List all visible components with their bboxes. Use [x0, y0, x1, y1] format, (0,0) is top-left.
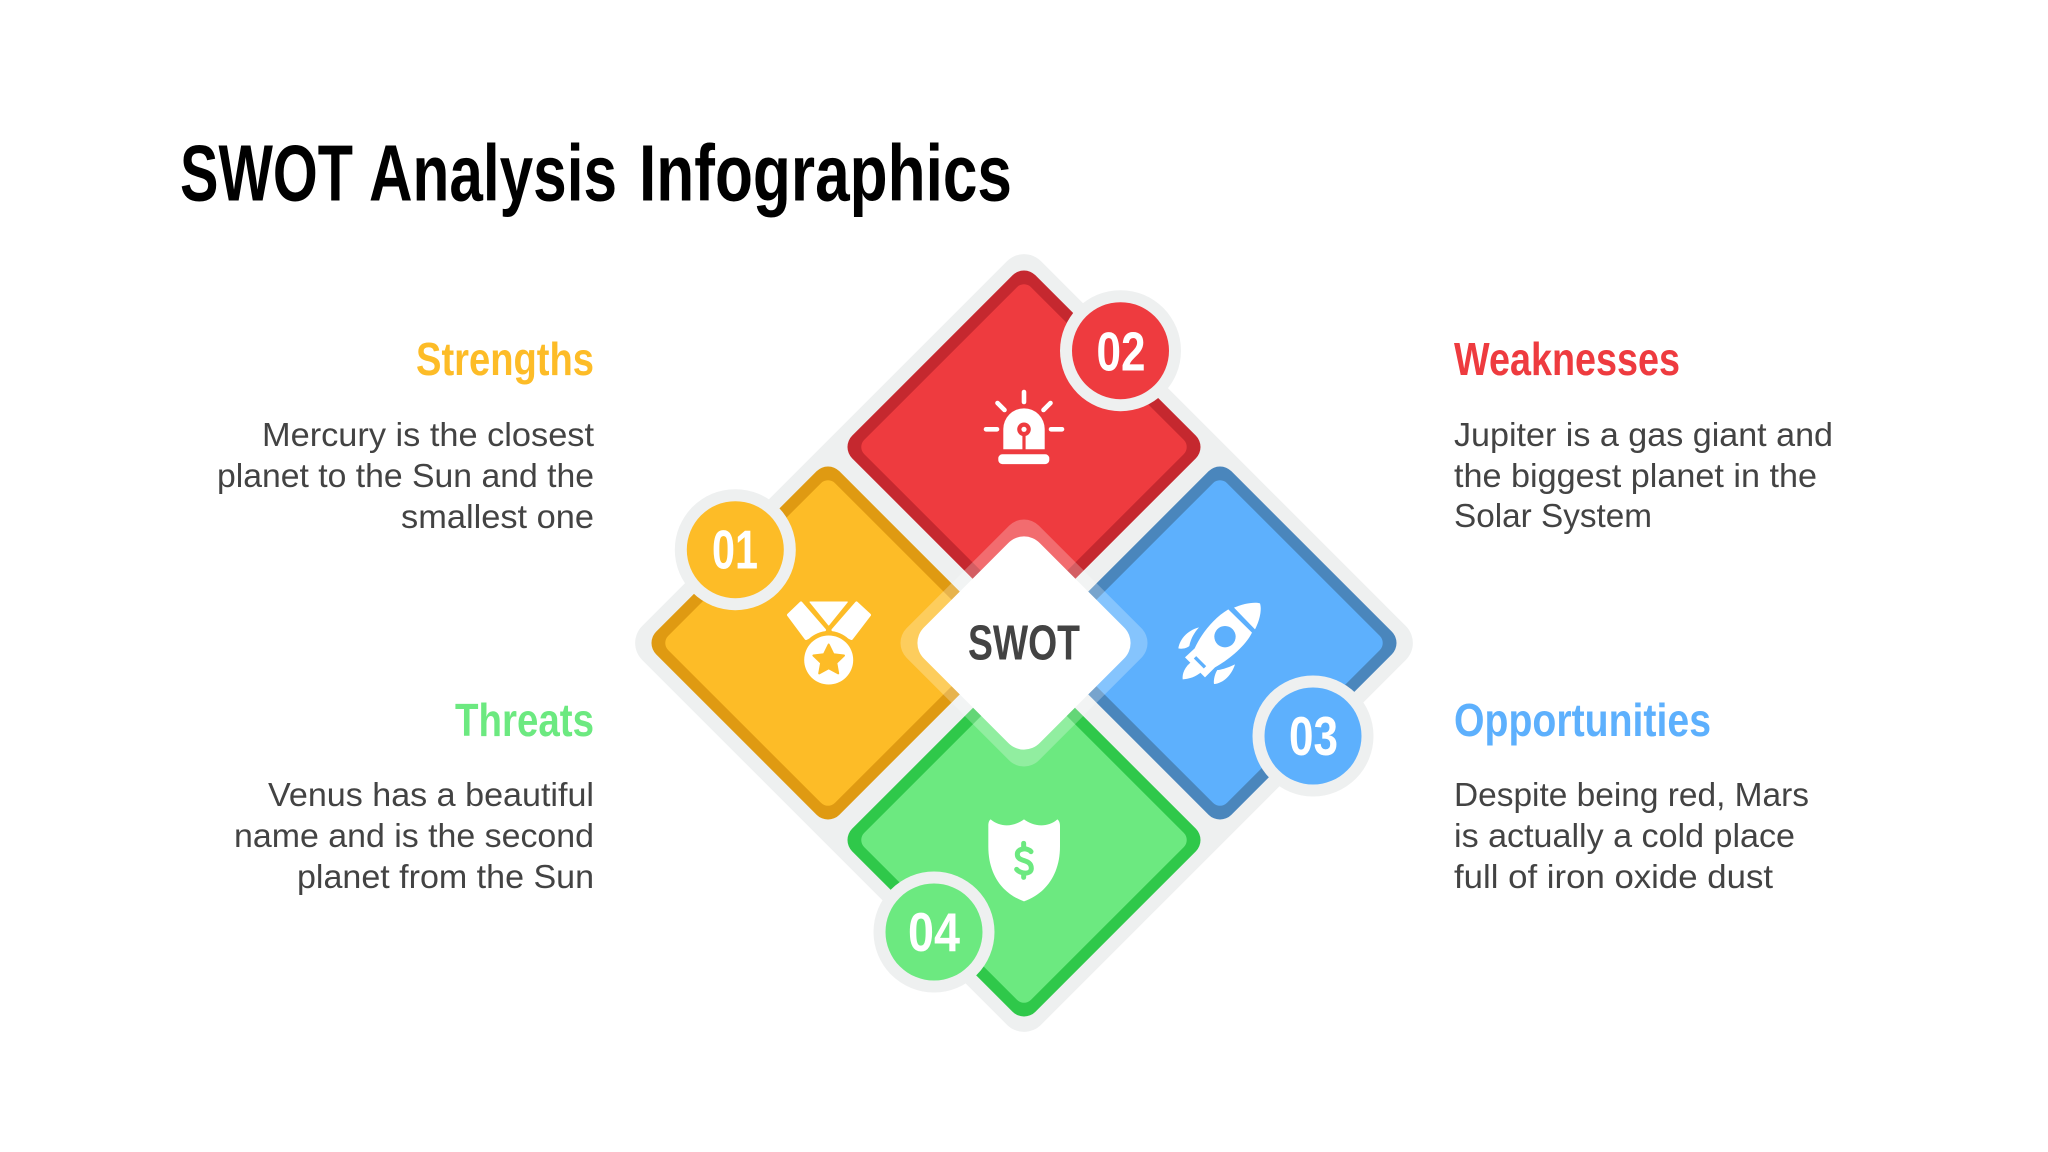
- panel: strengths diamond: [645, 460, 1011, 826]
- text block: strengths description: planet to the Sun and the: [217, 457, 594, 494]
- gray diamond background: [625, 244, 1423, 1042]
- icon: rocket: [1178, 603, 1261, 684]
- badge: 01: [675, 489, 796, 610]
- panel: threats diamond: [841, 657, 1207, 1023]
- title: Infographics: [639, 128, 1012, 218]
- badge: 04: 04: [908, 901, 960, 963]
- badge: 04: [874, 872, 994, 992]
- badge: 03: [1252, 676, 1374, 796]
- text block: threats description: name and is the second: [234, 817, 594, 854]
- text block: strengths description: Mercury is the closest: [262, 416, 594, 453]
- text block: weaknesses description: the biggest planet in the: [1454, 457, 1817, 494]
- title: SWOT: [180, 128, 353, 218]
- text block: opportunities description: is actually a cold place: [1454, 817, 1795, 854]
- text block: opportunities description: [1454, 776, 1809, 895]
- text block: strengths description: smallest one: [401, 498, 594, 535]
- panel: weaknesses text: [1454, 333, 1833, 534]
- heading: weaknesses: Weaknesses: [1454, 333, 1680, 385]
- panel: opportunities text: [1454, 694, 1809, 895]
- badge: 01: 01: [712, 518, 758, 580]
- panel: weaknesses diamond: [841, 264, 1207, 630]
- icon: shield with dollar: [988, 819, 1060, 901]
- badge: 02: [1060, 290, 1181, 411]
- icon: siren: [986, 392, 1062, 464]
- heading: opportunities: Opportunities: [1454, 694, 1711, 746]
- heading: threats: Threats: [455, 694, 594, 746]
- title: Analysis: [369, 128, 617, 218]
- panel: threats text: [234, 694, 594, 895]
- text block: strengths description: [217, 416, 594, 535]
- panel: opportunities diamond: [1037, 460, 1403, 826]
- heading: strengths: Strengths: [416, 333, 594, 385]
- badge: 02: 02: [1096, 320, 1146, 382]
- center white diamond: [908, 527, 1140, 759]
- text block: threats description: Venus has a beautiful: [268, 776, 594, 813]
- text block: opportunities description: full of iron oxide dust: [1454, 858, 1773, 895]
- text block: weaknesses description: [1454, 416, 1833, 534]
- title: [180, 128, 1012, 218]
- text block: weaknesses description: Solar System: [1454, 497, 1652, 534]
- icon: medal: [788, 602, 870, 689]
- text block: threats description: [234, 776, 594, 895]
- panel: strengths text: [217, 333, 594, 535]
- text block: threats description: planet from the Sun: [297, 858, 594, 895]
- text block: opportunities description: Despite being red, Mars: [1454, 776, 1809, 813]
- translucent center ring: [892, 511, 1156, 775]
- center label: SWOT: [968, 616, 1080, 670]
- text block: weaknesses description: Jupiter is a gas giant and: [1454, 416, 1833, 453]
- SWOT diamond diagram: [625, 244, 1423, 1042]
- badge: 03: 03: [1289, 705, 1338, 767]
